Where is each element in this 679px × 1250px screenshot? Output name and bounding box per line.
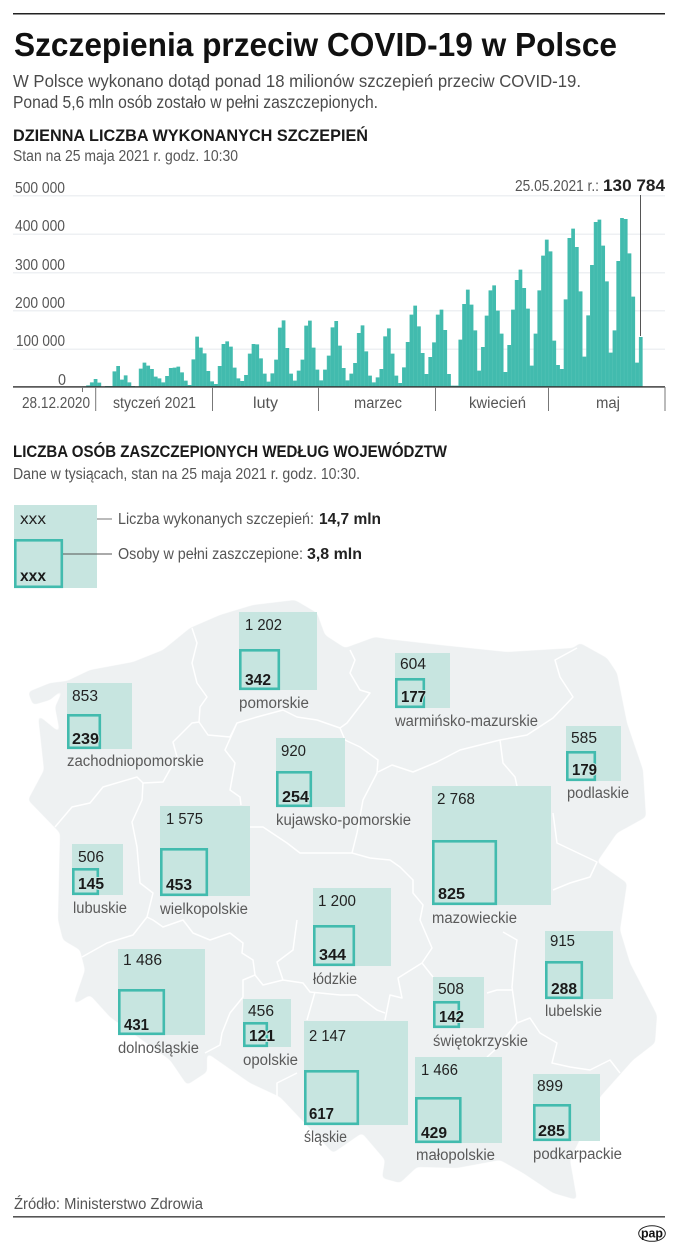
region: mazowieckie [432,786,551,927]
bar chart: daily vaccinations [13,177,666,412]
region: kujawsko-pomorskie: 920 [281,743,306,760]
region: pomorskie [239,612,317,712]
region: mazowieckie: 2 768 [437,791,475,808]
voivodeship borders [55,628,620,1097]
region: łódzkie: 344 [319,947,346,964]
region: warmińsko-mazurskie: warmińsko-mazurskie [394,713,538,730]
region: podkarpackie: 899 [537,1078,563,1095]
region: łódzkie: 1 200 [318,893,356,910]
region: opolskie [243,999,298,1069]
region: warmińsko-mazurskie: 177 [401,689,426,706]
region: warmińsko-mazurskie: 604 [400,656,426,673]
x axis: 28.12.2020 [22,395,90,412]
region: pomorskie: 342 [245,672,271,689]
region: lubuskie: lubuskie [73,900,127,917]
x axis: marzec [354,395,402,412]
map of Poland [28,600,657,1200]
region: lubelskie [545,931,613,1020]
region: małopolskie: 1 466 [421,1062,458,1079]
region: łódzkie [313,888,391,988]
region: świętokrzyskie: 142 [439,1009,464,1026]
x axis [13,386,666,412]
x axis: kwiecień [469,395,526,412]
callout: last value: 25.05.2021 r.: [515,178,599,195]
legend: 3,8 mln [307,546,362,563]
region: lubuskie: 506 [78,849,104,866]
region: podkarpackie [533,1074,622,1163]
legend: Osoby w pełni zaszczepione: [118,546,303,563]
x axis: luty [253,395,278,412]
region: podlaskie: 585 [571,730,597,747]
region: wielkopolskie: 453 [166,877,192,894]
chart subtitle: Stan na 25 maja 2021 r. godz. 10:30 [13,148,238,165]
region: dolnośląskie: dolnośląskie [118,1040,199,1057]
legend: 14,7 mln [319,511,381,528]
region: dolnośląskie: 431 [124,1017,149,1034]
region: lubelskie: 915 [550,933,575,950]
region: mazowieckie: mazowieckie [432,910,517,927]
region: kujawsko-pomorskie [276,738,411,829]
region: lubelskie: lubelskie [545,1003,602,1020]
heading: daily vaccinations: DZIENNA LICZBA WYKONANYCH SZCZEPIEŃ [13,126,368,145]
region: opolskie: 456 [248,1003,274,1020]
callout: last value: 130 784 [603,177,666,195]
heading: vaccinated by voivodeship: LICZBA OSÓB ZASZCZEPIONYCH WEDŁUG WOJEWÓDZTW [13,442,447,461]
map subtitle: Dane w tysiącach, stan na 25 maja 2021 r. godz. 10:30. [13,466,360,483]
region: podlaskie [566,726,629,802]
y axis labels: 100 000 [16,333,65,350]
y axis labels: 500 000 [15,180,65,197]
region: opolskie: 121 [249,1028,275,1045]
callout: last value [515,177,666,336]
region: zachodniopomorskie: 853 [72,688,98,705]
source: Źródło: Ministerstwo Zdrowia [14,1196,203,1213]
region: świętokrzyskie [433,977,528,1050]
legend: Liczba wykonanych szczepień: [118,511,314,528]
legend [14,505,381,588]
region: dolnośląskie: 1 486 [123,952,162,969]
region: podlaskie: podlaskie [567,785,629,802]
intro text: W Polsce wykonano dotąd ponad 18 milionów szczepień przeciw COVID-19. [13,71,581,91]
region: wielkopolskie: 1 575 [166,811,203,828]
y axis labels: 400 000 [15,218,65,235]
y axis labels: 0 [58,372,66,389]
region: podkarpackie: podkarpackie [533,1146,622,1163]
region: mazowieckie: 825 [438,886,465,903]
region: lubuskie [72,844,127,917]
region: małopolskie [415,1057,502,1164]
legend: xxx [20,511,46,528]
legend: xxx [20,568,46,585]
region: wielkopolskie: wielkopolskie [159,901,248,918]
region: wielkopolskie [159,806,250,918]
region: śląskie: śląskie [304,1129,347,1146]
region: zachodniopomorskie [67,683,204,770]
region: lubuskie: 145 [78,876,104,893]
y axis labels [15,180,66,389]
region: zachodniopomorskie: zachodniopomorskie [67,753,204,770]
y axis labels: 300 000 [15,257,65,274]
bars [82,218,643,387]
region: kujawsko-pomorskie: 254 [282,789,309,806]
region: świętokrzyskie: świętokrzyskie [433,1033,528,1050]
region: pomorskie: pomorskie [239,695,309,712]
x axis: maj [596,395,620,412]
region: kujawsko-pomorskie: kujawsko-pomorskie [276,812,411,829]
region: warmińsko-mazurskie [394,653,538,730]
region: zachodniopomorskie: 239 [72,731,99,748]
region: świętokrzyskie: 508 [438,981,464,998]
region: lubelskie: 288 [551,981,577,998]
logo: pap: pap [641,1226,663,1240]
y axis labels: 200 000 [15,295,65,312]
title: Szczepienia przeciw COVID-19 w Polsce [14,26,617,63]
region: łódzkie: łódzkie [313,971,357,988]
region: pomorskie: 1 202 [245,617,282,634]
region: małopolskie: 429 [421,1125,447,1142]
region: śląskie: 617 [309,1106,334,1123]
region: małopolskie: małopolskie [416,1147,495,1164]
region: podlaskie: 179 [572,762,597,779]
region: opolskie: opolskie [243,1052,298,1069]
region: dolnośląskie [118,949,205,1057]
region: podkarpackie: 285 [538,1123,565,1140]
intro text: Ponad 5,6 mln osób zostało w pełni zaszczepionych. [13,92,378,112]
intro text [13,71,581,112]
region: śląskie: 2 147 [309,1028,346,1045]
x axis: styczeń 2021 [113,395,196,412]
region: śląskie [304,1021,408,1146]
